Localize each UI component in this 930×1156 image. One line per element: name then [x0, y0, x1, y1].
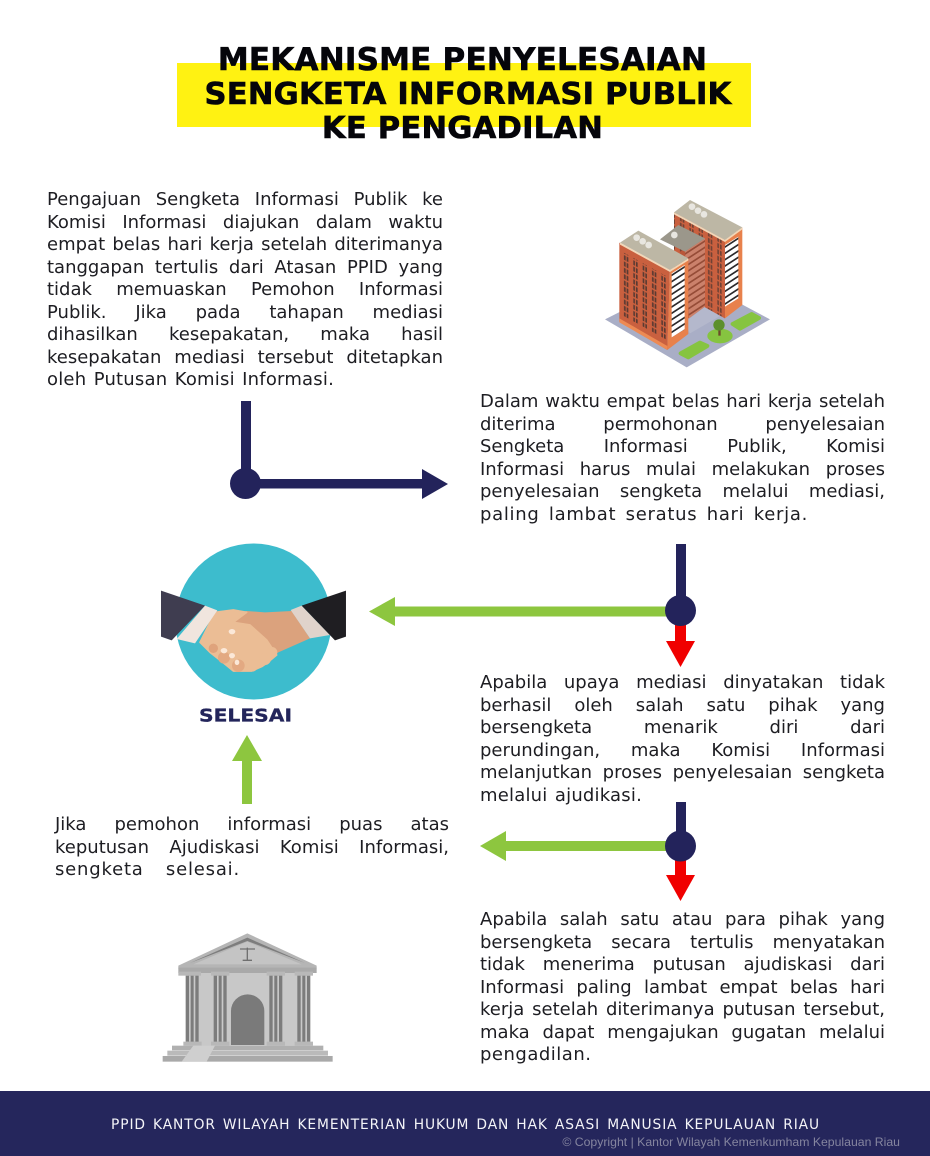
entablature and wall	[178, 968, 317, 973]
lawns and tree	[681, 314, 759, 357]
text block: mediasi: diterima permohonan penyelesaian	[480, 414, 885, 434]
text block: ajudikasi: Apabila upaya mediasi dinyatakan tidak	[480, 672, 885, 693]
text block: gugatan pengadilan: bersengketa secara tertulis menyatakan	[480, 932, 885, 952]
footer title: PPID KANTOR WILAYAH KEMENTERIAN HUKUM DAN HAK ASASI MANUSIA KEPULAUAN RIAU	[111, 1117, 820, 1133]
arrow: junction from ajudikasi to puas and pengadilan	[480, 802, 696, 901]
text block: pemohon puas: sengketa selesai.	[55, 859, 240, 880]
text block: pengajuan sengketa: Pengajuan Sengketa Informasi Publik ke	[47, 189, 443, 210]
text block: pengajuan sengketa: empat belas hari kerja setelah diterimanya	[47, 234, 443, 255]
steps	[172, 1046, 323, 1050]
door	[231, 994, 264, 1045]
fingers	[209, 644, 277, 672]
text block: pengajuan sengketa: tidak memuaskan Pemohon Informasi	[47, 279, 443, 300]
text block: ajudikasi: melanjutkan proses penyelesaian sengketa	[480, 762, 885, 783]
back hand	[230, 611, 310, 662]
title highlight band	[177, 63, 751, 127]
columns	[178, 972, 313, 1046]
text block: pemohon puas: Jika pemohon informasi puas atas	[55, 814, 449, 835]
ground plot	[605, 277, 770, 367]
text block: gugatan pengadilan	[480, 909, 885, 1065]
text block: pengajuan sengketa: Komisi Informasi diajukan dalam waktu	[47, 212, 443, 232]
text block: pengajuan sengketa: kesepakatan mediasi tersebut ditetapkan	[47, 346, 443, 368]
text block: ajudikasi	[480, 672, 885, 806]
pediment	[178, 933, 317, 968]
teal disc	[176, 544, 332, 700]
text block: pengajuan sengketa: tanggapan tertulis dari Atasan PPID yang	[47, 256, 443, 278]
title: MEKANISME PENYELESAIAN	[218, 42, 707, 78]
text block: ajudikasi: melalui ajudikasi.	[480, 784, 642, 806]
text block: pengajuan sengketa: oleh Putusan Komisi Informasi.	[47, 369, 334, 390]
text block: gugatan pengadilan: pengadilan.	[480, 1044, 591, 1065]
text block: mediasi: paling lambat seratus hari kerja.	[480, 504, 808, 524]
arrow: green up to selesai	[232, 735, 262, 804]
front tower	[619, 231, 688, 350]
text block: pengajuan sengketa: dihasilkan kesepakatan, maka hasil	[47, 324, 443, 345]
front hand	[200, 610, 277, 671]
text block: mediasi: penyelesaian sengketa melalui mediasi,	[480, 481, 885, 502]
copyright: © Copyright | Kantor Wilayah Kemenkumham Kepulauan Riau	[562, 1135, 900, 1149]
left cuff and sleeve	[177, 606, 217, 643]
text block: gugatan pengadilan: kerja setelah diterimanya putusan tersebut,	[480, 999, 885, 1020]
text block: gugatan pengadilan: Apabila salah satu atau para pihak yang	[480, 909, 885, 930]
title	[205, 42, 733, 146]
text block: mediasi: Dalam waktu empat belas hari kerja setelah	[480, 391, 885, 412]
text block: pemohon puas: keputusan Ajudiskasi Komisi Informasi,	[55, 836, 449, 858]
footer band	[0, 1091, 930, 1156]
back tower	[674, 200, 742, 318]
text block: mediasi: Sengketa Informasi Publik, Komisi	[480, 436, 885, 457]
text block: ajudikasi: berhasil oleh salah satu pihak yang	[480, 694, 885, 716]
arrow: junction from mediasi to selesai and ajudikasi	[369, 544, 696, 667]
icon: office buildings	[605, 200, 770, 367]
title: KE PENGADILAN	[322, 111, 603, 146]
text block: gugatan pengadilan: Informasi paling lambat empat belas hari	[480, 976, 885, 998]
text block: pengajuan sengketa	[47, 189, 443, 390]
arrow: navy corner to mediasi	[230, 401, 448, 499]
text block: gugatan pengadilan: tidak menerima putusan ajudiskasi dari	[480, 954, 885, 975]
text block: pemohon puas	[54, 814, 449, 880]
right cuff and sleeve	[291, 606, 330, 638]
text block: ajudikasi: bersengketa menarik diri dari	[480, 717, 885, 738]
scales	[240, 948, 255, 960]
icon: handshake	[161, 544, 346, 700]
text block: pengajuan sengketa: Publik. Jika pada tahapan mediasi	[47, 302, 443, 322]
text block: ajudikasi: perundingan, maka Komisi Informasi	[480, 740, 885, 760]
text block: mediasi	[480, 391, 885, 524]
label: selesai: SELESAI	[199, 706, 292, 726]
icon: courthouse	[163, 933, 333, 1062]
text block: gugatan pengadilan: maka dapat mengajukan gugatan melalui	[480, 1022, 885, 1042]
title: SENGKETA INFORMASI PUBLIK	[205, 77, 731, 112]
middle tower	[660, 225, 705, 318]
text block: mediasi: Informasi harus mulai melakukan proses	[480, 458, 885, 480]
